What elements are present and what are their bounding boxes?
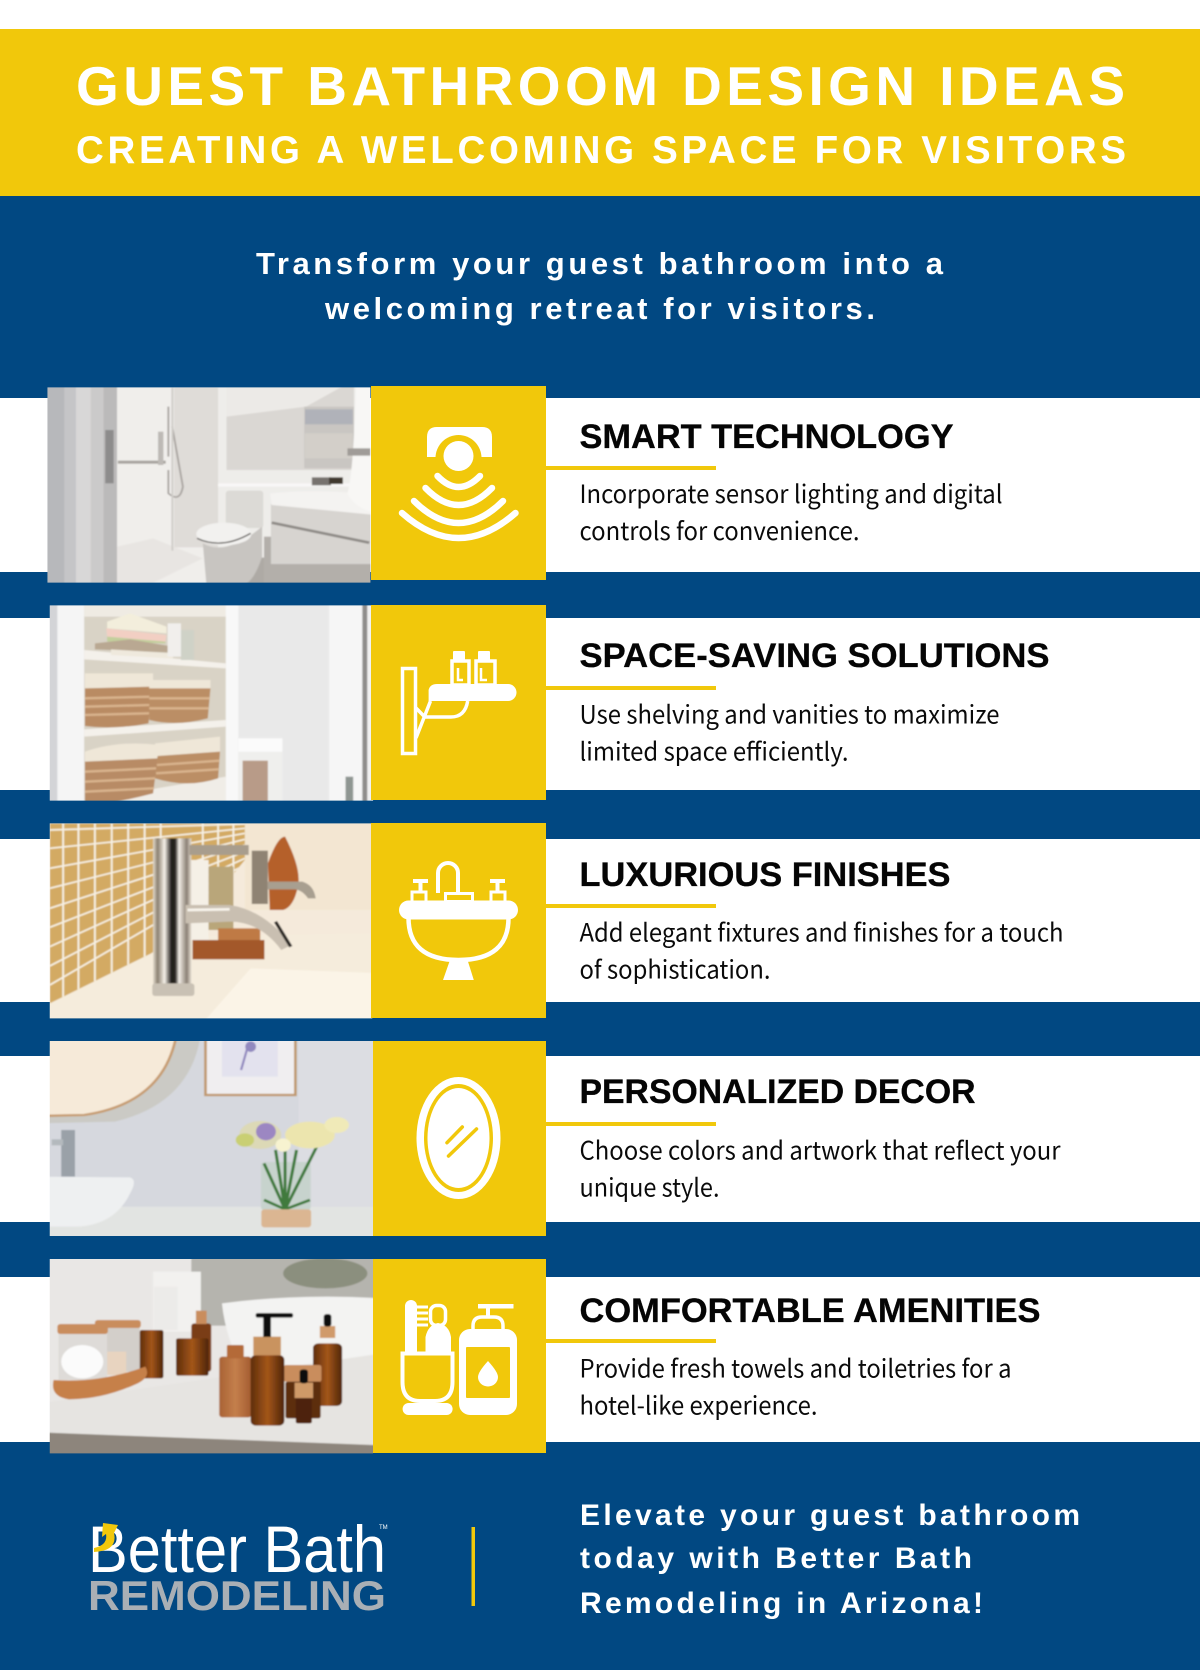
panel: personalized decor bbox=[0, 1033, 1200, 1243]
call to action: Remodeling in Arizona! bbox=[580, 1587, 983, 1620]
icon tile bbox=[371, 386, 546, 580]
photo: marble wall with flowers bbox=[50, 1041, 373, 1236]
panel: comfortable amenities bbox=[0, 1252, 1200, 1460]
connector rule bbox=[546, 1122, 716, 1126]
heading: PERSONALIZED DECOR bbox=[580, 1073, 976, 1111]
logo: Better Bath Remodeling: Better Bath bbox=[88, 1512, 386, 1586]
call to action: Elevate your guest bathroom bbox=[580, 1499, 1080, 1532]
description bbox=[580, 1350, 1012, 1422]
heading: SPACE-SAVING SOLUTIONS bbox=[580, 637, 1050, 675]
icon: oval mirror bbox=[416, 1077, 500, 1199]
heading: SMART TECHNOLOGY bbox=[580, 418, 954, 456]
description bbox=[580, 696, 1000, 768]
description bbox=[580, 914, 1064, 986]
photo: amber toiletries on counter bbox=[50, 1259, 374, 1454]
icon: wall shelf with bottles bbox=[402, 651, 516, 754]
logo: Better Bath Remodeling: TM bbox=[379, 1525, 388, 1531]
intro text: welcoming retreat for visitors. bbox=[324, 291, 875, 326]
connector rule bbox=[546, 686, 716, 690]
description: of sophistication. bbox=[580, 950, 770, 986]
description: Use shelving and vanities to maximize bbox=[580, 696, 1000, 732]
description bbox=[580, 475, 1002, 548]
connector rule bbox=[546, 1339, 716, 1343]
intro text: Transform your guest bathroom into a bbox=[256, 246, 944, 281]
photo: chrome faucet with tile wall bbox=[50, 823, 372, 1018]
heading: LUXURIOUS FINISHES bbox=[580, 856, 950, 894]
description: limited space efficiently. bbox=[580, 732, 848, 768]
panel: space-saving solutions bbox=[0, 600, 1200, 807]
description: Provide fresh towels and toiletries for a bbox=[580, 1350, 1012, 1386]
icon: toothbrush cup and soap dispenser bbox=[402, 1300, 517, 1415]
logo: Better Bath Remodeling: REMODELING bbox=[88, 1572, 386, 1619]
icon tile bbox=[371, 823, 546, 1018]
icon: bathroom sink bbox=[399, 863, 518, 980]
icon tile bbox=[373, 1259, 546, 1453]
connector rule bbox=[546, 466, 716, 470]
call to action bbox=[580, 1499, 1080, 1620]
header banner bbox=[0, 0, 1200, 196]
description: unique style. bbox=[580, 1168, 720, 1204]
description: Choose colors and artwork that reflect your bbox=[580, 1132, 1061, 1168]
description: hotel-like experience. bbox=[580, 1386, 818, 1422]
icon tile bbox=[373, 1041, 546, 1236]
intro text bbox=[256, 246, 944, 326]
connector rule bbox=[546, 904, 716, 908]
logo: Better Bath Remodeling bbox=[88, 1512, 388, 1619]
divider bbox=[472, 1527, 475, 1606]
logo arrow bbox=[94, 1523, 118, 1552]
icon: motion sensor bbox=[402, 427, 516, 538]
subtitle: CREATING A WELCOMING SPACE FOR VISITORS bbox=[76, 129, 1126, 172]
panel: luxurious finishes bbox=[0, 817, 1200, 1025]
heading: COMFORTABLE AMENITIES bbox=[580, 1292, 1040, 1330]
photo: shelves with wicker baskets bbox=[50, 605, 374, 801]
call to action: today with Better Bath bbox=[580, 1542, 972, 1575]
title: GUEST BATHROOM DESIGN IDEAS bbox=[76, 55, 1125, 117]
description: controls for convenience. bbox=[580, 512, 860, 548]
description: Incorporate sensor lighting and digital bbox=[580, 475, 1002, 511]
panel: smart technology bbox=[0, 380, 1200, 590]
photo: modern bathroom with shower bbox=[47, 387, 370, 583]
icon tile bbox=[371, 605, 546, 800]
description bbox=[580, 1132, 1061, 1204]
description: Add elegant fixtures and finishes for a touch bbox=[580, 914, 1064, 950]
